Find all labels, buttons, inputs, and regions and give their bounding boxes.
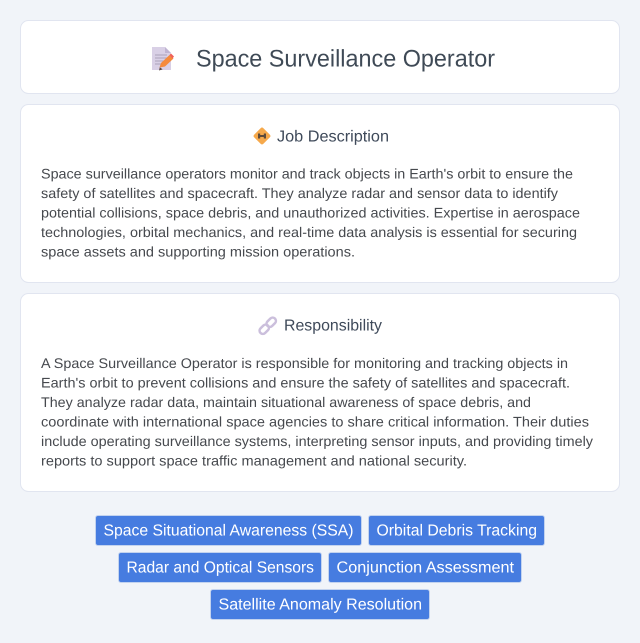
text block: job description: technologies, orbital mechanics, and real-time data analysis is essential for securing <box>41 224 577 240</box>
panel: responsibility <box>20 294 620 492</box>
tag: conjunction assessment: Conjunction Assessment <box>336 560 515 576</box>
text block: responsibility: coordinate with international space agencies to share critical information. Their duties <box>41 414 589 430</box>
icon: chain link <box>258 316 277 335</box>
tag: space situational awareness <box>96 516 362 546</box>
text block: responsibility: include operating surveillance systems, interpreting sensor inputs, and providing timely <box>41 433 593 449</box>
text block: job description: Space surveillance operators monitor and track objects in Earth's orbit to ensure the <box>41 165 573 181</box>
icon: document with pencil <box>152 47 174 70</box>
tag: orbital debris tracking <box>368 516 544 546</box>
tag: conjunction assessment <box>328 552 522 582</box>
tag: orbital debris tracking: Orbital Debris Tracking <box>376 522 537 540</box>
title: Space Surveillance Operator <box>196 45 495 72</box>
tag: satellite anomaly resolution: Satellite Anomaly Resolution <box>218 596 422 614</box>
text block: responsibility <box>41 355 593 469</box>
text block: job description: space assets and supporting mission operations. <box>41 244 355 260</box>
text block: job description: potential collisions, space debris, and unauthorized activities. Expertise in aerospace <box>41 204 580 220</box>
text block: responsibility: A Space Surveillance Operator is responsible for monitoring and tracking objects in <box>41 355 568 371</box>
tag: radar and optical sensors: Radar and Optical Sensors <box>126 560 314 576</box>
text block: responsibility: reports to support space traffic management and national security. <box>41 453 467 469</box>
text block: responsibility: They analyze radar data, maintain situational awareness of space debris, and <box>41 394 531 410</box>
icon: diamond sign <box>253 127 271 145</box>
heading: job description: Job Description <box>277 128 389 145</box>
tag list <box>96 516 544 620</box>
text block: responsibility: Earth's orbit to prevent collisions and ensure the safety of satellites and spacecraft. <box>41 374 570 390</box>
tag: satellite anomaly resolution <box>210 590 430 620</box>
text block: job description: safety of satellites and spacecraft. They analyze radar and sensor data to identify <box>41 185 558 201</box>
tag: space situational awareness: Space Situational Awareness (SSA) <box>104 522 354 540</box>
panel: title card <box>20 20 620 94</box>
text block: job description <box>41 165 580 260</box>
heading: responsibility: Responsibility <box>284 317 382 334</box>
tag: radar and optical sensors <box>118 552 322 582</box>
panel: job description <box>20 104 620 282</box>
